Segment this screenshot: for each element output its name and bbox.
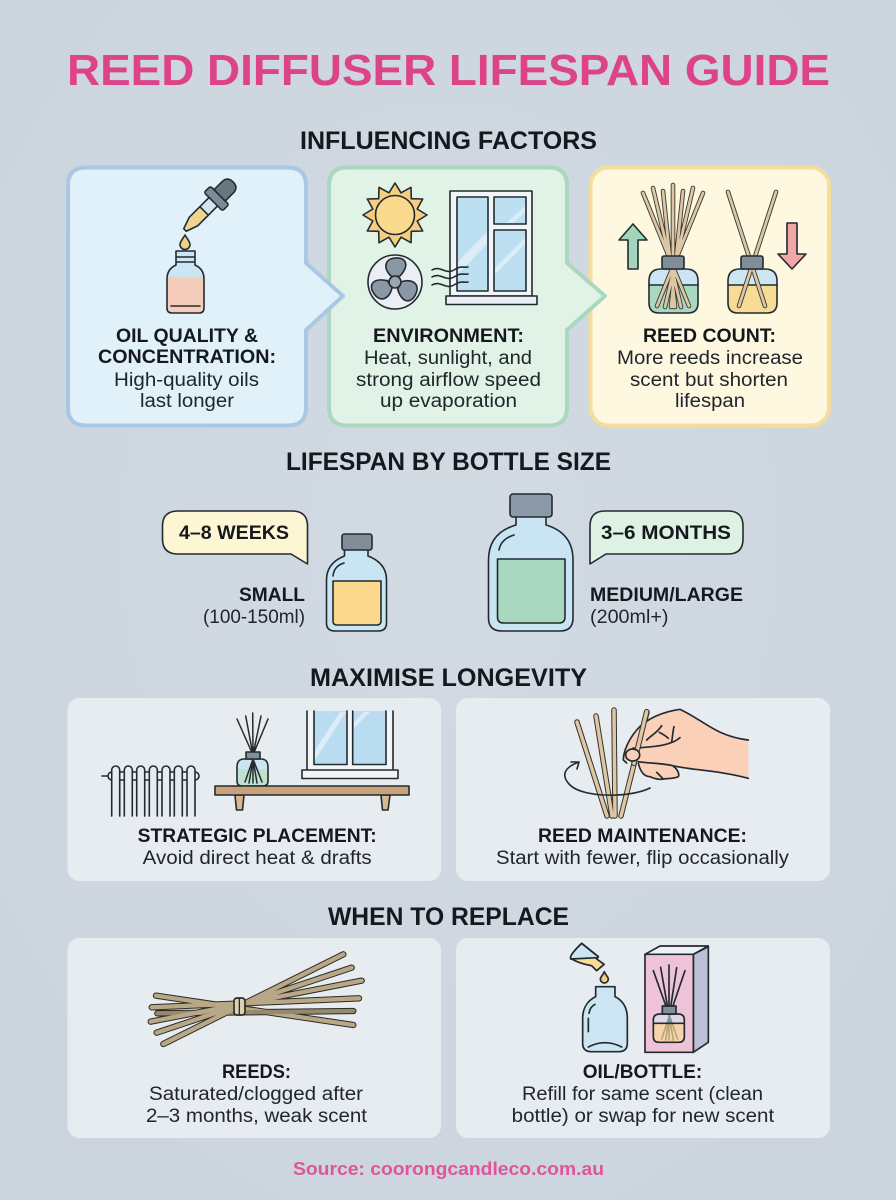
icon: oil drop: [180, 235, 190, 250]
text: oil and bottle: bottle) or swap for new scent: [512, 1106, 775, 1127]
label: medium/large: MEDIUM/LARGE: [590, 585, 743, 606]
label: small: [203, 585, 305, 628]
icon: sun: [363, 183, 427, 247]
label: small: SMALL: [239, 585, 305, 606]
heading: maximise longevity: MAXIMISE LONGEVITY: [310, 664, 587, 692]
text: reeds: 2–3 months, weak scent: [146, 1106, 368, 1127]
panel: reeds: [68, 938, 441, 1138]
icon: small bottle: [326, 534, 386, 631]
text: environment: up evaporation: [380, 391, 517, 412]
heading: influencing factors: INFLUENCING FACTORS: [300, 127, 597, 155]
text: oil quality: CONCENTRATION:: [98, 347, 276, 368]
panel: reed maintenance: [456, 698, 830, 881]
icon: up arrow: [619, 224, 647, 269]
icon: boxed diffuser: [653, 965, 685, 1042]
icon: hand: [623, 709, 748, 779]
panel: reed count: [590, 168, 829, 426]
text: environment: Heat, sunlight, and: [364, 348, 532, 369]
text: maintenance: Start with fewer, flip occasionally: [496, 848, 790, 869]
text: reeds: [146, 1062, 368, 1127]
text: oil quality: High-quality oils: [114, 370, 259, 391]
icon: wind lines: [432, 267, 468, 286]
text: placement: [138, 826, 377, 869]
label: medium/large: [590, 585, 743, 628]
card: reed count: [590, 168, 829, 426]
callout: 3-6 months: 3–6 MONTHS: [601, 523, 731, 544]
text: oil quality: OIL QUALITY &: [116, 326, 258, 347]
card: reeds: [68, 938, 441, 1138]
text: environment: [356, 326, 541, 412]
card: environment with arrow: [329, 168, 605, 426]
heading: lifespan by bottle size: LIFESPAN BY BOTTLE SIZE: [286, 448, 611, 476]
icon: small diffuser: [237, 713, 268, 786]
card: oil quality with arrow: [68, 168, 343, 426]
icon: radiator: [102, 766, 199, 816]
icon: rotation arrow: [565, 762, 650, 795]
icon: refill drop: [600, 972, 608, 983]
text: oil quality: last longer: [140, 391, 235, 412]
label: medium/large: (200ml+): [590, 607, 668, 628]
panel: environment: [329, 168, 605, 426]
icon: oil bottle: [167, 251, 204, 313]
icon: refill bottle and box: [571, 943, 708, 1052]
text: oil and bottle: OIL/BOTTLE:: [583, 1062, 702, 1083]
icon: down arrow: [778, 223, 806, 269]
text: environment: strong airflow speed: [356, 370, 541, 391]
heading: when to replace: WHEN TO REPLACE: [328, 903, 569, 931]
icon: reeds being flipped: [577, 710, 647, 816]
title: REED DIFFUSER LIFESPAN GUIDE: [67, 46, 830, 95]
panel: strategic placement: [68, 698, 441, 881]
icon: fan: [368, 255, 422, 309]
callout: 3-6 months: [590, 511, 743, 564]
card: oil and bottle: [456, 938, 830, 1138]
icon: diffuser with few reeds: [728, 192, 777, 313]
card: placement: [68, 698, 441, 881]
card: maintenance: [456, 698, 830, 881]
panel: oil and bottle: [456, 938, 830, 1138]
icon: placement window: [302, 711, 398, 778]
callout: 4-8 weeks: [162, 511, 308, 564]
callout: 4-8 weeks: 4–8 WEEKS: [179, 523, 289, 544]
icon: diffuser with many reeds: [643, 185, 703, 313]
text: reed count: REED COUNT:: [643, 326, 776, 347]
text: maintenance: REED MAINTENANCE:: [538, 826, 747, 847]
icon: shelf: [215, 786, 409, 810]
text: oil quality: [98, 326, 276, 412]
icon: dropper: [176, 173, 242, 239]
text: reeds: Saturated/clogged after: [149, 1084, 364, 1105]
text: placement: Avoid direct heat & drafts: [143, 848, 372, 869]
icon: product box: [645, 946, 708, 1052]
text: maintenance: [496, 826, 790, 869]
text: placement: STRATEGIC PLACEMENT:: [138, 826, 377, 847]
text: reed count: lifespan: [675, 391, 745, 412]
text: reeds: REEDS:: [222, 1062, 291, 1083]
text: reed count: scent but shorten: [630, 370, 788, 391]
panel: oil quality: [68, 168, 343, 426]
label: small: (100-150ml): [203, 607, 305, 628]
text: reed count: [617, 326, 803, 412]
icon: window: [446, 191, 537, 304]
text: oil and bottle: [512, 1062, 775, 1127]
text: environment: ENVIRONMENT:: [373, 326, 524, 347]
source line: Source: coorongcandleco.com.au: [293, 1159, 604, 1179]
text: reed count: More reeds increase: [617, 348, 803, 369]
icon: empty glass bottle: [583, 987, 627, 1052]
icon: large bottle: [488, 494, 573, 631]
icon: reed bundle: [151, 954, 362, 1044]
icon: pouring bottle: [571, 943, 604, 971]
text: oil and bottle: Refill for same scent (clean: [522, 1084, 763, 1105]
